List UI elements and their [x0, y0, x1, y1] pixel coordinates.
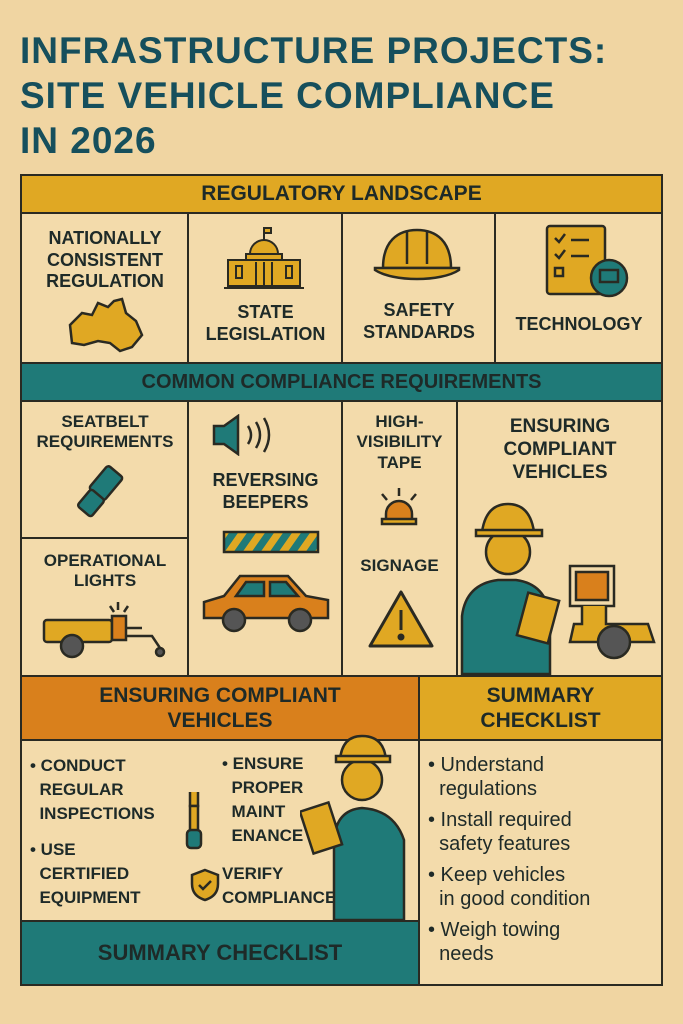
text: seatbelt requirements: SEATBELT [61, 412, 149, 431]
text: verify compliance [222, 864, 336, 907]
footer: summary checklist: SUMMARY CHECKLIST [98, 940, 342, 965]
text: ensure proper maintenance: ENANCE [231, 826, 303, 845]
text: use certified equipment: CERTIFIED [39, 864, 129, 883]
text: reversing beepers [212, 470, 319, 512]
item: understand regulations [428, 754, 544, 800]
text: operational lights [44, 551, 166, 590]
text: technology: TECHNOLOGY [515, 314, 642, 334]
text: ensuring compliant vehicles: COMPLIANT [504, 439, 616, 460]
text: seatbelt requirements [37, 412, 173, 451]
header: summary checklist (gold): SUMMARY [487, 684, 594, 707]
text: reversing beepers: REVERSING [212, 470, 319, 490]
text: use certified equipment: EQUIPMENT [39, 888, 141, 907]
header: ensuring compliant vehicles: ENSURING COMPLIANT [99, 684, 341, 707]
text: nationally consistent regulation: NATIONALLY [48, 228, 162, 248]
illustration: worker with tablet and machine [460, 502, 656, 675]
text: ensure proper maintenance: PROPER [231, 778, 303, 797]
illustration: worker with clipboard [300, 734, 406, 920]
text: ensuring compliant vehicles: ENSURING [510, 416, 610, 437]
text: state legislation: STATE [237, 302, 294, 322]
text: nationally consistent regulation [46, 228, 164, 291]
title [20, 30, 607, 161]
text: use certified equipment [30, 840, 141, 907]
item: weigh towing needs: • Weigh towing [428, 919, 560, 941]
icon: capitol [224, 227, 304, 289]
title: IN 2026 [20, 120, 157, 161]
item: understand regulations: regulations [439, 778, 537, 800]
title: INFRASTRUCTURE PROJECTS: [20, 30, 607, 71]
item: install safety features: • Install required [428, 809, 572, 831]
text: ensuring compliant vehicles [504, 416, 616, 483]
text: safety standards [363, 300, 475, 342]
item: weigh towing needs [428, 919, 560, 965]
icon: warning sign [368, 590, 434, 648]
icon: shield check [190, 868, 220, 902]
item: weigh towing needs: needs [439, 943, 494, 965]
text: high-visibility tape [356, 412, 442, 472]
icon: beacon [380, 488, 418, 526]
main panel [20, 174, 663, 986]
header: ensuring compliant vehicles: VEHICLES [167, 709, 273, 732]
text: verify compliance: VERIFY [222, 864, 283, 883]
header: common compliance requirements [20, 362, 663, 402]
text: ensuring compliant vehicles: VEHICLES [512, 462, 608, 483]
text: high-visibility tape: TAPE [377, 453, 422, 472]
icon: hard hat [374, 228, 460, 280]
item: understand regulations: • Understand [428, 754, 544, 776]
text: safety standards: STANDARDS [363, 322, 475, 342]
icon: car [202, 574, 330, 632]
text: conduct regular inspections [30, 756, 155, 823]
icon: wrench [186, 792, 202, 850]
item: install safety features [428, 809, 572, 855]
text: nationally consistent regulation: REGULATION [46, 271, 164, 291]
header: regulatory landscape: REGULATORY LANDSCAPE [201, 182, 482, 205]
icon: seatbelt buckle [77, 465, 124, 518]
footer: summary checklist [20, 920, 420, 986]
text: verify compliance: COMPLIANCE [222, 888, 336, 907]
icon: australia [68, 298, 144, 352]
text: conduct regular inspections: INSPECTIONS [39, 804, 155, 823]
icon: checklist tablet [546, 224, 628, 298]
icon: speaker [212, 414, 270, 456]
panel: summary checklist items [418, 739, 663, 986]
text: operational lights: OPERATIONAL [44, 551, 166, 570]
panel: regulatory cells [187, 214, 496, 362]
header: ensuring compliant vehicles [20, 675, 420, 741]
text: ensure proper maintenance: • ENSURE [222, 754, 304, 773]
text: conduct regular inspections: REGULAR [39, 780, 124, 799]
text: reversing beepers: BEEPERS [222, 492, 309, 512]
item: keep vehicles: in good condition [439, 888, 590, 910]
panel: ensuring list [20, 739, 420, 922]
text: operational lights: LIGHTS [74, 571, 136, 590]
header: regulatory landscape [20, 174, 663, 214]
header: common compliance requirements: COMMON COMPLIANCE REQUIREMENTS [142, 370, 542, 392]
text: high-visibility tape: VISIBILITY [357, 432, 442, 451]
text: nationally consistent regulation: CONSISTENT [47, 250, 163, 270]
panel: requirements cells [22, 402, 458, 675]
text: ensure proper maintenance [222, 754, 304, 845]
text: use certified equipment: • USE [30, 840, 76, 859]
text: conduct regular inspections: • CONDUCT [30, 756, 126, 775]
text: signage: SIGNAGE [360, 556, 439, 575]
item: install safety features: safety features [439, 833, 570, 855]
icon: trailer light [42, 602, 166, 658]
text: seatbelt requirements: REQUIREMENTS [37, 432, 173, 451]
title: SITE VEHICLE COMPLIANCE [20, 75, 555, 116]
text: state legislation [206, 302, 325, 344]
text: state legislation: LEGISLATION [206, 324, 325, 344]
icon: hazard tape [222, 530, 320, 554]
header: summary checklist (gold) [418, 675, 663, 741]
text: high-visibility tape: HIGH- [375, 412, 424, 431]
text: ensure proper maintenance: MAINT [231, 802, 285, 821]
text: safety standards: SAFETY [383, 300, 454, 320]
item: keep vehicles: • Keep vehicles [428, 864, 565, 886]
header: summary checklist (gold): CHECKLIST [480, 709, 601, 732]
item: keep vehicles [428, 864, 590, 910]
